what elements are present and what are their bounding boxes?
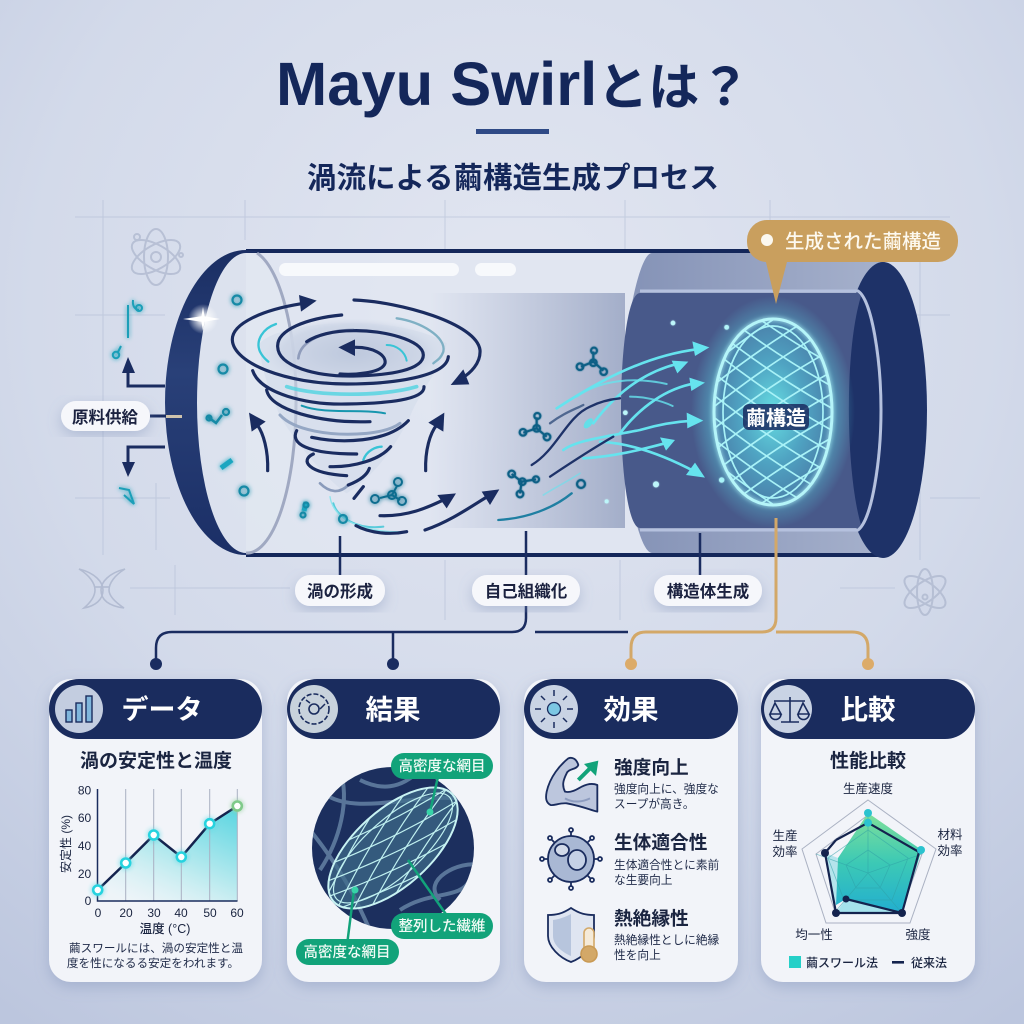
panel: effects: 強度向上 [614,757,689,778]
panel: data: データ [122,694,202,725]
label: self organisation: 自己組織化 [485,581,568,601]
line chart: 50 [203,906,217,920]
line chart: 40 [174,906,188,920]
panel: results: 結果 [366,694,420,725]
line chart: 60 [230,906,244,920]
icon: shield with thermometer [548,908,597,962]
icon: bars [55,685,103,733]
left ring [197,253,295,553]
radar chart: 材料 [937,828,963,842]
radar chart: 効率 [772,845,798,859]
panel: effects: 生体適合性 [614,832,708,853]
icon: atom top left [127,229,185,285]
panel: results [270,679,516,982]
label: structure generation [654,575,762,606]
cocoon detail circle [312,767,474,939]
highlights [279,263,459,276]
line chart: 30 [147,906,161,920]
panel header [287,679,500,739]
particles outside tube [113,300,142,504]
line chart: 温度 (°C) [140,921,190,936]
panel: data: 渦の安定性と温度 [80,750,232,772]
panel: comparison: 性能比較 [830,750,906,772]
right end sleeve [622,253,885,553]
panel: data [49,679,262,982]
icon: atom bottom right [900,569,950,615]
icon: sun [530,685,578,733]
tube body [246,251,820,555]
callout: high-density mesh bottom: 高密度な網目 [304,944,390,961]
callout: high-density mesh top: 高密度な網目 [398,758,486,775]
panel: effects: 熱絶縁性としに絶縁 [614,933,720,947]
panel: effects: な生要向上 [614,873,673,887]
icon: cell [540,828,602,890]
radar chart: 生産速度 [843,781,893,796]
panel: effects [524,679,738,982]
callout: aligned fibres [391,913,493,939]
panel: effects: 効果 [604,694,658,725]
radar chart: 生産 [772,829,798,843]
icon: muscle [546,758,598,812]
vortex [232,295,499,533]
panel: data: 度を性になるる安定をわれます。 [67,956,239,970]
callout: high-density mesh top [391,753,493,779]
callout: generated cocoon [747,220,958,304]
radar chart: 効率 [937,844,963,858]
icon: cell dish [290,685,338,733]
radar chart: 強度 [905,927,931,942]
molecule in the mid tube [371,478,406,505]
line chart: 0 [95,906,102,920]
panel: effects: 強度向上に、強度な [614,782,719,796]
label: feed: 原料供給 [72,408,138,427]
label: self organisation [472,575,580,606]
label: vortex formation [295,575,385,606]
cocoon structure [694,300,852,524]
cocoon structure: 繭構造 [746,407,806,430]
legend [789,955,947,970]
radar chart: 均一性 [795,928,833,942]
panel: effects: スープが高き。 [614,797,695,811]
panel header [761,679,975,739]
legend: 繭スワール法 [806,955,878,970]
line chart: 40 [78,839,91,853]
dark inner panel [621,293,880,528]
legend: 従来法 [911,955,947,970]
title: Mayu Swirlとは？ [276,50,750,119]
subtitle: 渦流による繭構造生成プロセス [307,162,719,195]
label: feed [61,401,150,431]
line chart: 安定性 (%) [59,815,73,873]
line chart: 60 [78,811,91,825]
right end cap [839,262,927,558]
label: vortex formation: 渦の形成 [307,581,373,601]
callout: high-density mesh bottom [296,939,399,965]
line chart: 80 [78,784,91,798]
line chart [59,784,244,936]
icon: scales [764,685,812,733]
line chart: 20 [119,906,133,920]
panel header [49,679,262,739]
raw material particles [206,296,347,523]
callout: generated cocoon: 生成された繭構造 [785,231,941,253]
lens flare [183,304,220,334]
panel: effects: 熱絶縁性 [614,908,689,929]
panel: effects: 性を向上 [614,948,661,962]
radar chart [772,781,963,942]
panel: comparison: 比較 [840,694,896,725]
panel: effects: 生体適合性とに素前 [614,858,720,872]
flow and molecules [498,321,729,520]
panel: data: 繭スワールには、渦の安定性と温 [69,941,243,955]
line chart: 20 [78,867,91,881]
reactor tube [165,250,927,558]
line chart: 0 [85,894,92,908]
label: structure generation: 構造体生成 [667,581,749,601]
panel header [524,679,738,739]
feed arrows [128,362,166,470]
connectors [156,518,868,662]
icon: crescent symbol [79,569,125,608]
panel: comparison [761,679,975,982]
callout: aligned fibres: 整列した繊維 [398,918,486,935]
